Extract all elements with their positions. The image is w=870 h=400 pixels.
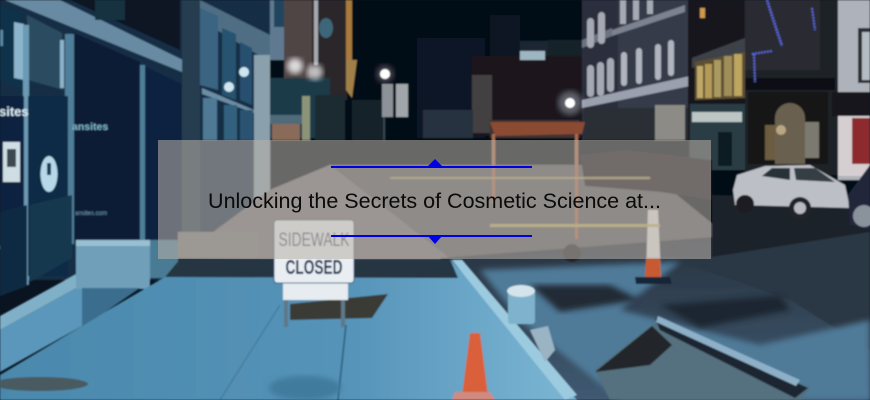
sidewalk	[0, 259, 577, 400]
right buildings: lit shopfront block	[688, 0, 748, 170]
sign: sidewalk closed	[274, 220, 388, 327]
mid-left brick buildings	[268, 0, 382, 140]
orange traffic cones	[452, 210, 672, 400]
road surface	[440, 195, 870, 400]
right buildings: arched facade	[582, 0, 692, 140]
left storefront upper fascia and glass	[0, 0, 270, 286]
distant buildings	[417, 15, 584, 138]
storefront signage: ansites.com	[75, 211, 107, 217]
sign: sidewalk closed: SIDEWALK	[278, 230, 350, 251]
broken concrete slab	[530, 316, 810, 400]
storefront signage: ansites	[72, 121, 108, 133]
title text: Unlocking the Secrets of Cosmetic Science at...	[208, 189, 661, 213]
paint bucket	[507, 285, 535, 324]
sky	[0, 0, 870, 270]
far right white building with red window	[832, 0, 870, 180]
storefront signage	[0, 104, 108, 251]
construction trailer and barricades	[390, 122, 660, 262]
sign: sidewalk closed: CLOSED	[286, 257, 342, 279]
title banner panel	[158, 140, 711, 259]
parked cars	[733, 165, 870, 230]
pavement and street behind the banner	[178, 150, 720, 262]
storefront lower wall and base	[0, 195, 178, 372]
bottom divider with down arrow	[331, 235, 532, 244]
right buildings: arched doorway block with blue lights	[745, 0, 840, 175]
top divider with up arrow	[331, 159, 532, 168]
street lamps and signs	[287, 58, 582, 140]
